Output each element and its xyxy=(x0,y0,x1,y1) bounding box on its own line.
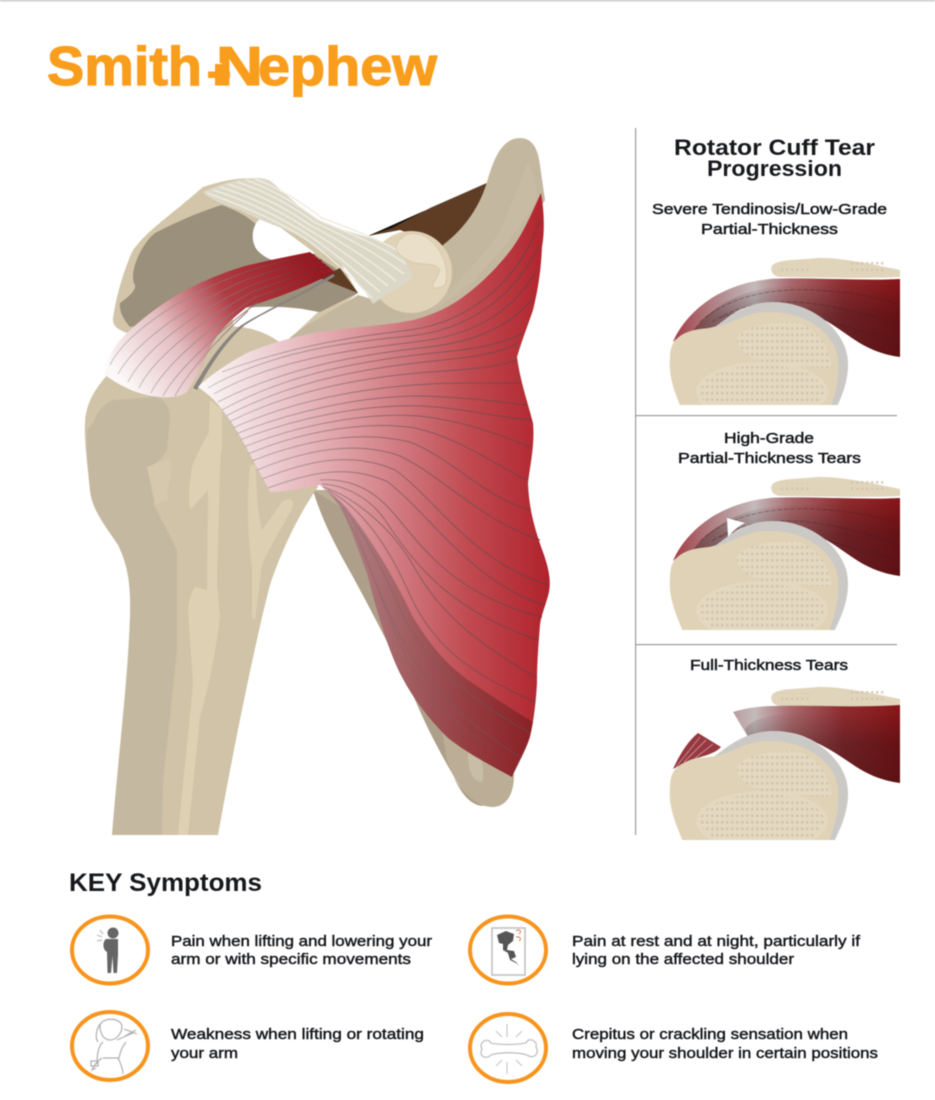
heading: KEY Symptoms: KEY Symptoms xyxy=(69,869,262,897)
heading: Rotator Cuff Tear Progression xyxy=(674,135,875,181)
tear notch xyxy=(727,518,745,537)
dark tissue behind acromion xyxy=(368,182,489,247)
infraspinatus and teres muscle xyxy=(198,193,550,777)
scapula lower body xyxy=(313,490,514,807)
text xyxy=(572,933,861,968)
icon: person lying in bed xyxy=(470,916,546,984)
text xyxy=(171,933,432,968)
text: lying on the affected shoulder xyxy=(572,951,794,968)
panel: severe tendinosis / low-grade partial-thickness xyxy=(652,201,900,422)
heading: Rotator Cuff Tear Progression: Progression xyxy=(707,156,842,181)
symptom: crepitus xyxy=(470,1014,878,1082)
label: Partial-Thickness xyxy=(701,221,838,238)
text: Pain at rest and at night, particularly if xyxy=(572,933,861,950)
label: Severe Tendinosis/Low-Grade xyxy=(652,201,887,218)
label: High-Grade xyxy=(724,430,814,447)
text xyxy=(572,1026,878,1062)
supraspinatus muscle and tendon xyxy=(105,252,335,397)
panel divider lines xyxy=(635,128,897,835)
icon: bone with crack rays xyxy=(470,1014,546,1082)
text: your arm xyxy=(171,1045,238,1062)
cross-section illustration xyxy=(670,477,900,641)
symptom: pain when lifting xyxy=(72,916,432,984)
logo: Smith+Nephew xyxy=(47,35,437,97)
text: Crepitus or crackling sensation when xyxy=(572,1026,848,1043)
text: arm or with specific movements xyxy=(171,951,411,968)
panel: high-grade partial-thickness tears xyxy=(670,430,900,641)
symptom: weakness xyxy=(72,1012,424,1080)
label xyxy=(652,201,887,238)
symptom: pain at rest and night xyxy=(470,916,861,984)
acromion and scapular neck xyxy=(283,138,545,345)
label: Partial-Thickness Tears xyxy=(678,450,861,467)
text xyxy=(171,1026,424,1062)
label xyxy=(678,430,861,467)
heading: Rotator Cuff Tear Progression: Rotator Cuff Tear xyxy=(674,135,875,160)
text: Pain when lifting and lowering your xyxy=(171,933,432,950)
text: moving your shoulder in certain positions xyxy=(572,1045,878,1062)
humeral head detail xyxy=(396,234,447,288)
logo: Smith+Nephew: N xyxy=(216,35,263,97)
coracoacromial ligament xyxy=(203,178,413,304)
humeral head socket xyxy=(370,231,452,313)
humerus xyxy=(85,326,318,835)
scapular blade upper xyxy=(113,178,358,345)
logo: Smith+Nephew: ephew xyxy=(258,35,437,97)
cross-section illustration xyxy=(670,258,900,422)
white gap under ligament xyxy=(253,214,315,261)
logo: Smith+Nephew: Smith xyxy=(47,35,202,97)
anatomical illustration: shoulder from behind xyxy=(85,138,550,835)
cross-section illustration xyxy=(670,687,900,851)
text: Weakness when lifting or rotating xyxy=(171,1026,424,1043)
panel: full-thickness tears xyxy=(670,657,900,851)
label: Full-Thickness Tears xyxy=(690,657,848,674)
icon: person with shoulder pain xyxy=(72,916,148,984)
icon: person lifting weight xyxy=(72,1012,148,1080)
